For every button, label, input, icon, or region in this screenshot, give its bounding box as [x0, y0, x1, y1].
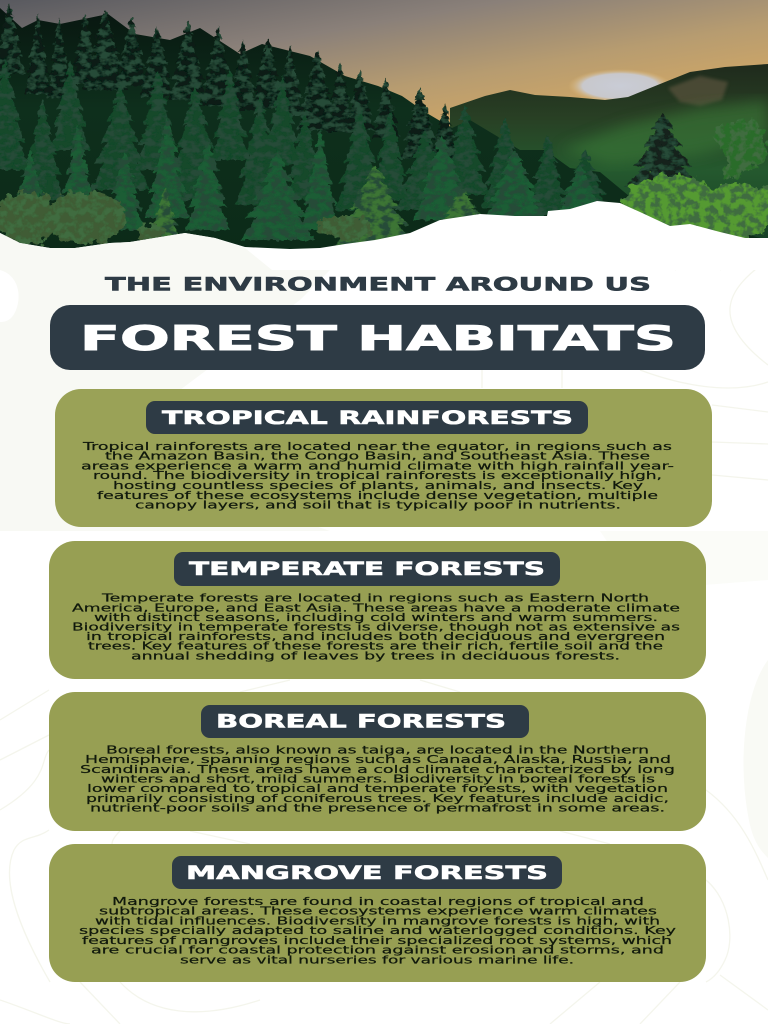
- lit middle trees: [10, 118, 605, 240]
- distant mountains: [450, 64, 768, 240]
- sun glow: [568, 69, 672, 103]
- text: boreal forests description: Boreal forests, also known as taiga, are located in the Northern: [106, 744, 649, 756]
- text: mangrove forests description: [79, 896, 676, 966]
- text: boreal forests description: Scandinavia. These areas have a cold climate characterized by long: [80, 764, 675, 776]
- hero photo: forest at sunset: [0, 0, 768, 260]
- text: temperate forests description: trees. Key features of these forests are their rich, fertile soil and the: [88, 641, 663, 653]
- title banner: [50, 305, 705, 370]
- deep middle trees: [0, 60, 610, 215]
- text: tropical rainforests description: areas experience a warm and humid climate with high rainfall year-: [81, 460, 674, 472]
- text: tropical rainforests description: features of these ecosystems include dense vegetation, multiple: [97, 490, 658, 502]
- heading: boreal forests: BOREAL FORESTS: [216, 712, 506, 733]
- text: temperate forests description: with distinct seasons, including cold winters and warm summers.: [94, 612, 658, 624]
- text: tropical rainforests description: Tropical rainforests are located near the equator, in regions such as: [81, 441, 672, 453]
- heading: boreal forests: [201, 705, 529, 738]
- text: boreal forests description: Hemisphere, spanning regions such as Canada, Alaska, Russia, and: [85, 754, 671, 766]
- heading: tropical rainforests: [146, 401, 588, 434]
- sunlit foreground trees: [150, 165, 485, 245]
- text: temperate forests description: Biodiversity in temperate forests is diverse, though not as extensive as: [72, 622, 680, 634]
- text: temperate forests description: in tropical rainforests, and includes both deciduous and evergreen: [86, 631, 665, 643]
- text: mangrove forests description: species specially adapted to saline and waterlogged conditions. Key: [79, 925, 676, 937]
- text: temperate forests description: [72, 593, 680, 662]
- torn edge off-white tint: [0, 233, 272, 270]
- panel: boreal forests: [49, 692, 706, 831]
- heading: temperate forests: TEMPERATE FORESTS: [189, 559, 545, 580]
- text: mangrove forests description: are crucial for coastal protection against erosion and storms, and: [91, 945, 664, 957]
- text: tropical rainforests description: hosting countless species of plants, animals, and insects. Key: [113, 480, 643, 492]
- dark conifer on the right: [618, 112, 708, 212]
- text: tropical rainforests description: canopy layers, and soil that is typically poor in nutrients.: [135, 500, 621, 512]
- torn paper edge: [0, 201, 768, 270]
- heading: temperate forests: [174, 552, 560, 586]
- text: mangrove forests description: subtropical areas. These ecosystems experience warm climates: [99, 906, 657, 918]
- text: boreal forests description: [80, 744, 675, 815]
- forest slope: [0, 8, 768, 260]
- text: boreal forests description: primarily consisting of coniferous trees. Key features include acidic,: [86, 793, 669, 805]
- panel: mangrove forests: [49, 844, 706, 982]
- text: mangrove forests description: Mangrove forests are found in coastal regions of tropical and: [112, 896, 644, 908]
- heading: mangrove forests: [172, 856, 562, 889]
- panel: tropical rainforests: [55, 389, 712, 527]
- text: temperate forests description: Temperate forests are located in regions such as Eastern North: [100, 593, 649, 605]
- bright bushes bottom right: [622, 175, 768, 240]
- text: tropical rainforests description: [81, 441, 674, 512]
- heading: mangrove forests: MANGROVE FORESTS: [186, 863, 548, 884]
- text: mangrove forests description: features of mangroves include their specialized root systems, which: [82, 935, 672, 947]
- text: mangrove forests description: serve as vital nurseries for various marine life.: [180, 954, 574, 966]
- text: temperate forests description: annual shedding of leaves by trees in deciduous forests.: [131, 650, 620, 662]
- text: tropical rainforests description: the Amazon Basin, the Congo Basin, and Southeast Asia. These: [105, 451, 650, 463]
- leafy branch top right: [713, 119, 767, 179]
- subtitle: THE ENVIRONMENT AROUND US: [105, 275, 651, 296]
- text: tropical rainforests description: round. The biodiversity in tropical rainforests is exceptionally high,: [93, 470, 662, 482]
- sky: [0, 0, 768, 240]
- text: mangrove forests description: with tidal influences. Biodiversity in mangrove forests is high, with: [95, 915, 660, 927]
- text: temperate forests description: America, Europe, and East Asia. These areas have a moderate climate: [72, 602, 680, 614]
- dark background trees along ridge: [0, 4, 460, 164]
- heading: tropical rainforests: TROPICAL RAINFORESTS: [162, 408, 573, 429]
- text: boreal forests description: lower compared to tropical and temperate forests, with vegetation: [87, 783, 668, 795]
- sunlit foliage bottom left: [0, 192, 373, 244]
- text: boreal forests description: nutrient-poor soils and the presence of permafrost in some areas.: [90, 803, 665, 815]
- text: boreal forests description: winters and short, mild summers. Biodiversity in boreal forests is: [101, 774, 655, 786]
- title banner: FOREST HABITATS: [80, 319, 676, 359]
- panel: temperate forests: [49, 541, 706, 679]
